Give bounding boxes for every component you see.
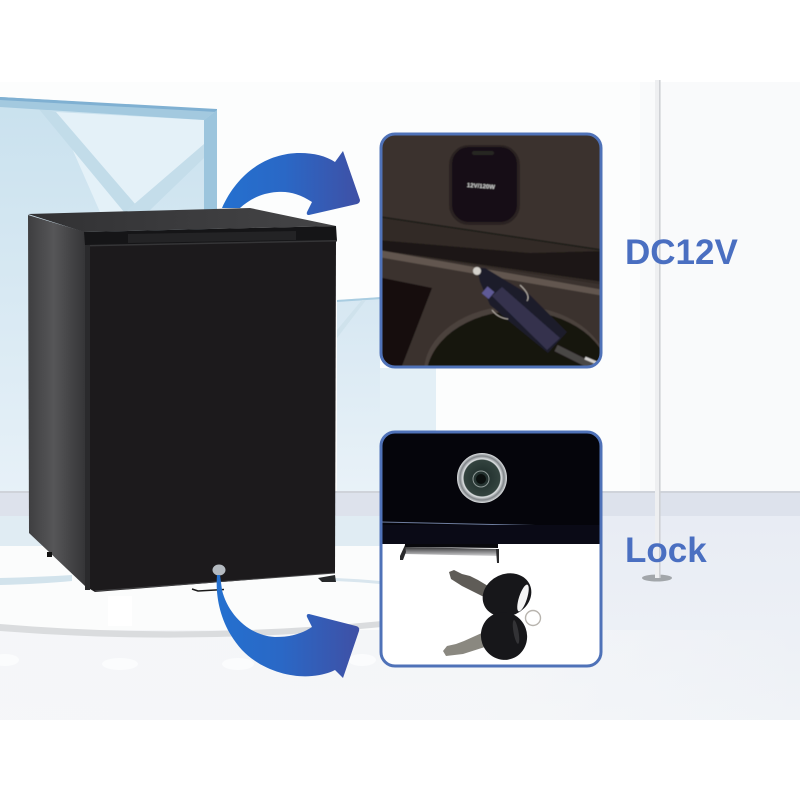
fridge side <box>28 215 85 586</box>
car plug <box>473 267 604 372</box>
socket cover <box>449 145 520 225</box>
lower key blade <box>443 633 484 656</box>
fridge edge <box>85 245 90 590</box>
label: DC12V: DC12V <box>625 233 738 272</box>
fridge bottom lip <box>95 573 335 591</box>
door handle <box>400 544 499 563</box>
lower console <box>382 258 532 284</box>
lower key head <box>480 614 528 660</box>
panel: DC12V car socket <box>380 132 602 368</box>
pole and base <box>642 80 672 582</box>
upper key blade <box>449 570 488 598</box>
second window behind fridge <box>337 297 436 494</box>
round platform <box>0 546 382 670</box>
fridge handle <box>192 589 224 591</box>
fridge hinge strip <box>84 226 337 246</box>
socket ledge <box>378 216 604 285</box>
key ring <box>526 610 540 626</box>
fridge front door <box>85 240 336 592</box>
fridge foot left <box>47 552 52 557</box>
dark gap <box>378 240 604 282</box>
fridge lock <box>212 564 226 576</box>
door seam <box>382 522 534 525</box>
cup holder <box>424 308 600 366</box>
infographic canvas <box>0 80 800 720</box>
left dark tray <box>382 278 432 366</box>
floor band <box>0 491 800 720</box>
upper key head <box>482 573 532 615</box>
socket label: 12V/120W <box>467 183 495 191</box>
arrow: bottom, lock to Lock panel <box>217 575 359 678</box>
keys <box>443 565 540 666</box>
fridge lid <box>28 208 336 232</box>
console highlight ridge <box>378 250 604 296</box>
arrow: top, fridge to DC12V panel <box>222 151 360 215</box>
left window <box>0 97 217 494</box>
panel: Lock <box>380 431 602 668</box>
label: Lock: Lock <box>625 531 707 570</box>
lock cylinder <box>457 453 507 503</box>
fridge <box>28 208 337 592</box>
fridge foot right <box>318 575 336 582</box>
